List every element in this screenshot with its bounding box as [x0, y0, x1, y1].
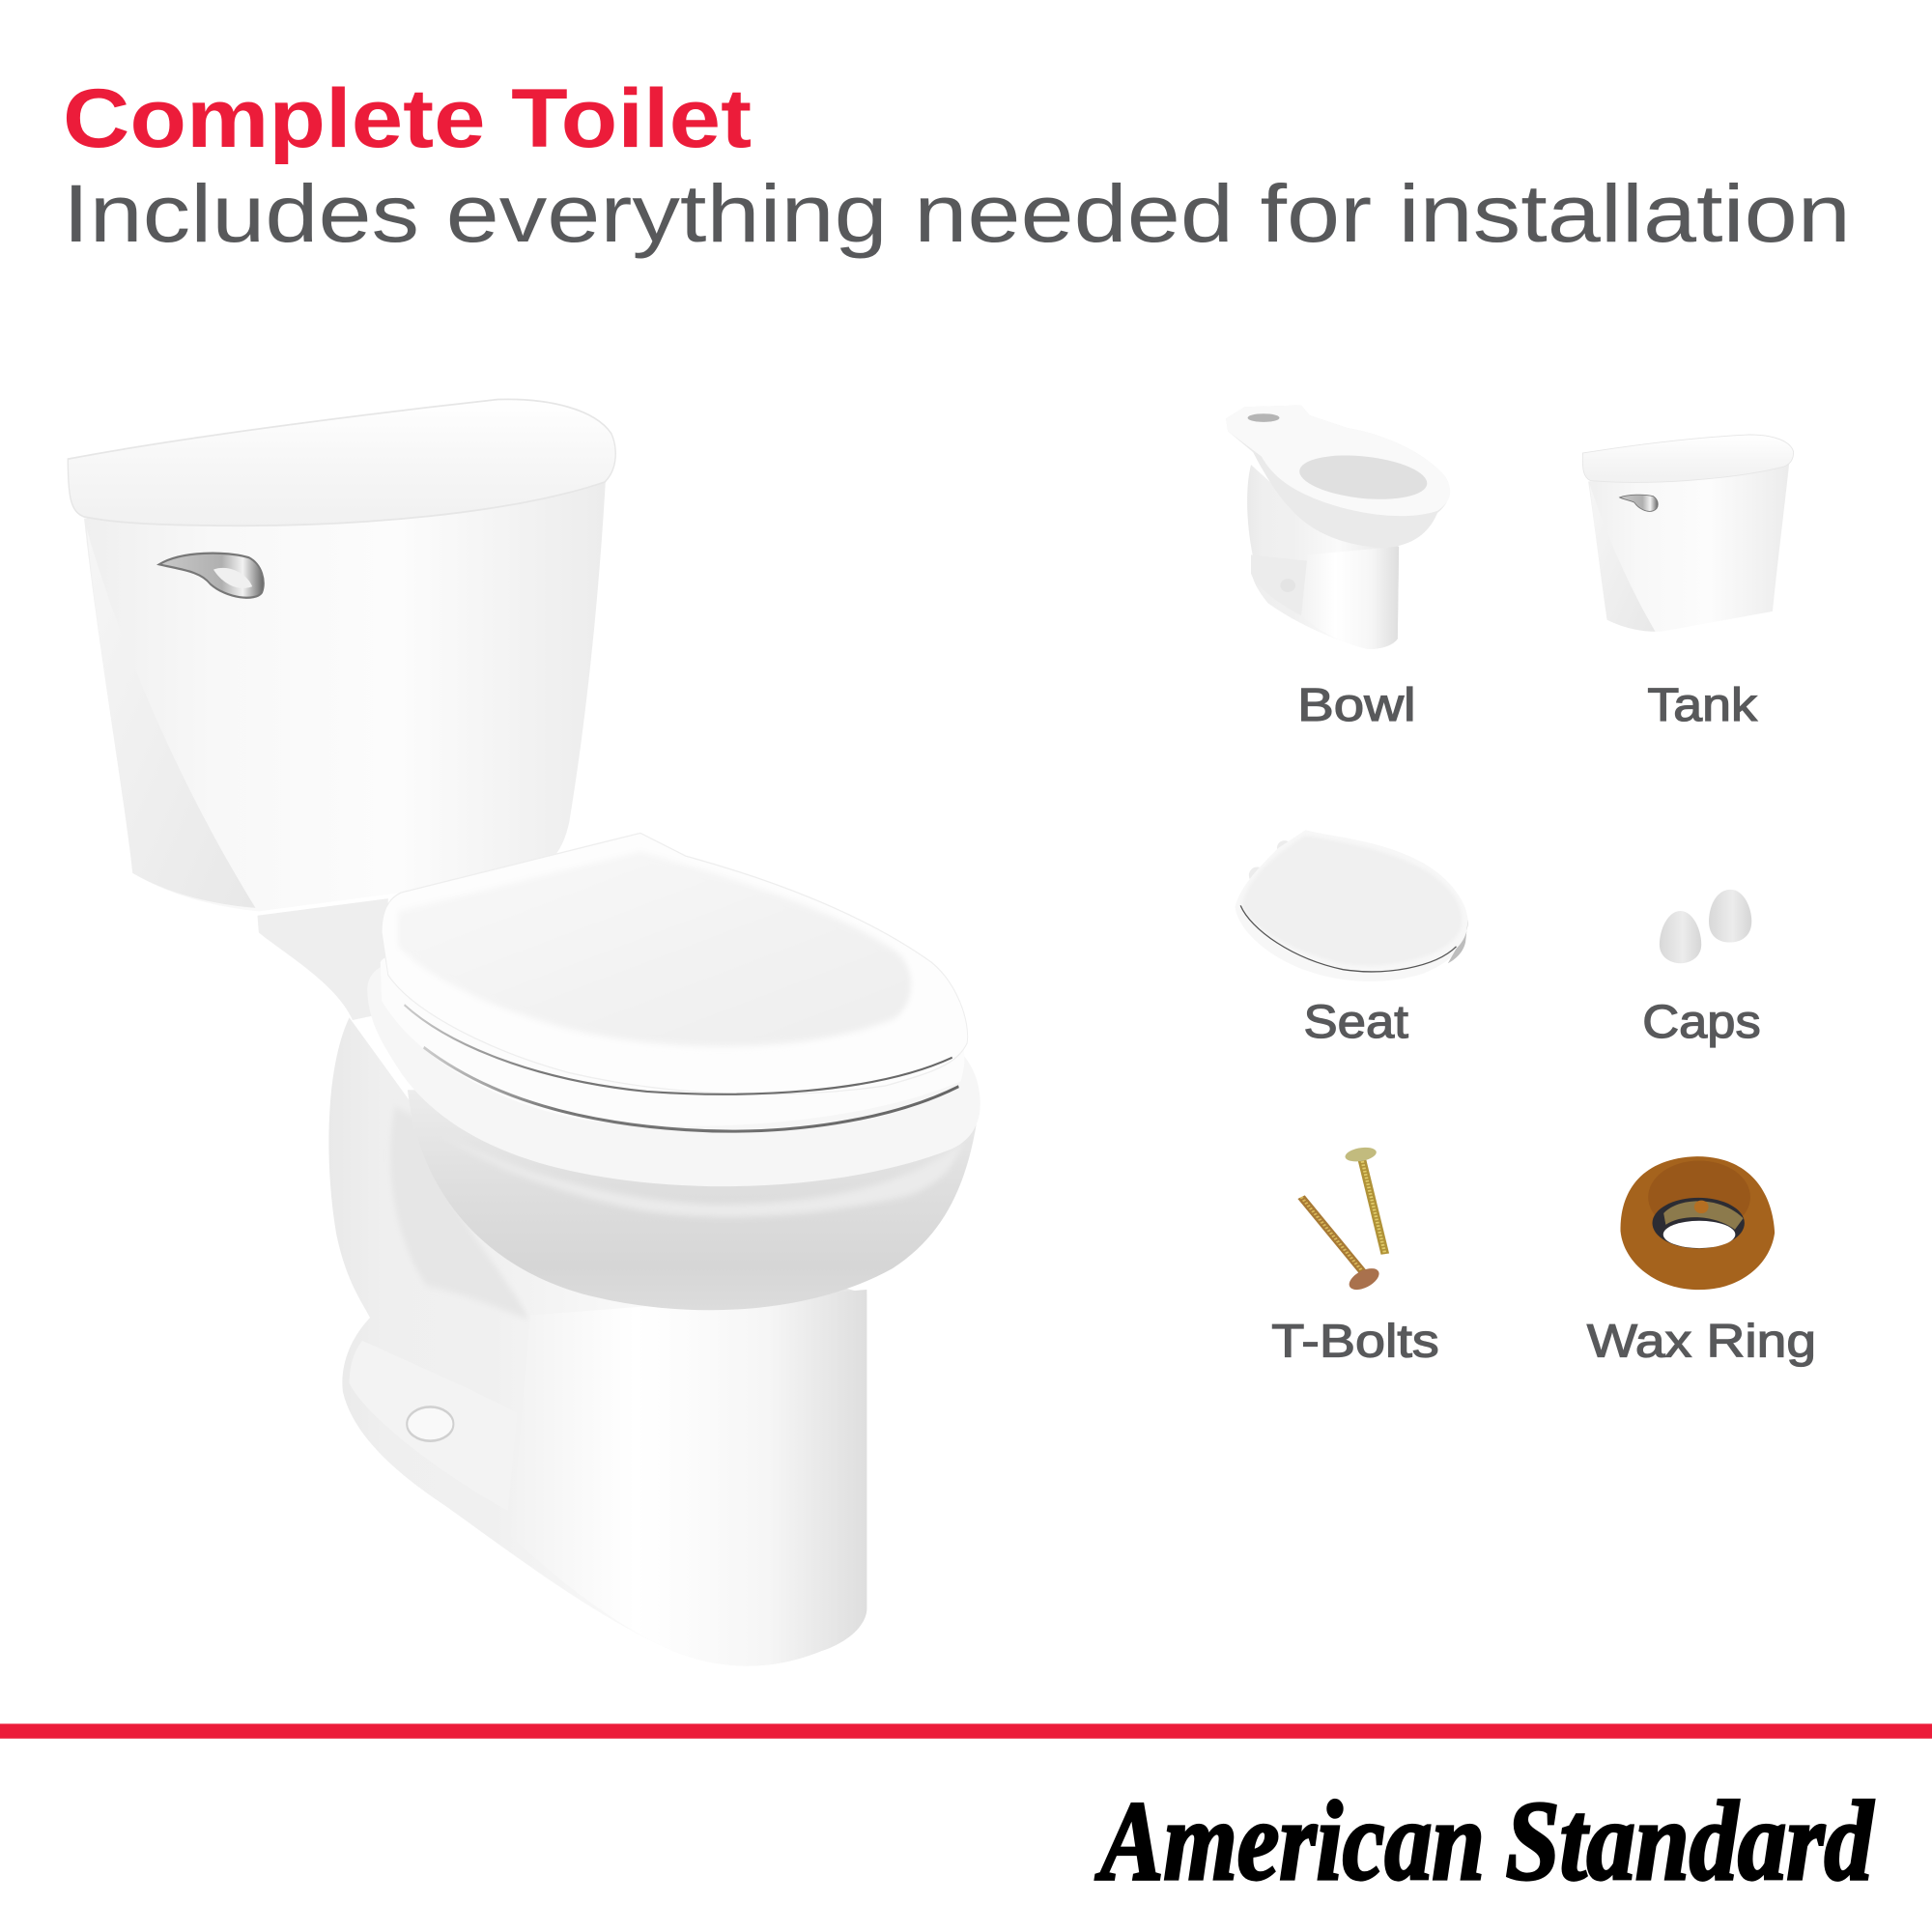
parts: bowl — [1226, 406, 1450, 649]
bowl rim — [367, 959, 980, 1186]
label: Caps: Caps — [1642, 996, 1761, 1048]
seat shadow lines — [405, 1005, 958, 1131]
neck — [258, 898, 388, 1020]
seat lid — [382, 833, 968, 1094]
lighter bowl band — [440, 1132, 964, 1217]
flush handle — [159, 554, 264, 598]
label: T-Bolts: T-Bolts — [1271, 1315, 1439, 1367]
bowl underside — [408, 1090, 980, 1310]
parts: seat — [1236, 830, 1468, 981]
tank lid — [68, 399, 615, 526]
pedestal — [511, 1290, 867, 1666]
foot ledge — [350, 1341, 518, 1511]
rear body and foot — [328, 1017, 867, 1666]
title: Complete Toilet: Complete Toilet — [63, 71, 752, 165]
label: Tank: Tank — [1647, 679, 1758, 731]
main toilet illustration — [68, 399, 980, 1666]
parts: t-bolts — [1301, 1145, 1385, 1293]
label: Wax Ring: Wax Ring — [1587, 1315, 1816, 1367]
label: Seat: Seat — [1303, 996, 1408, 1048]
parts: caps — [1660, 890, 1751, 963]
label: Bowl: Bowl — [1297, 679, 1416, 731]
red divider bar — [0, 1723, 1932, 1739]
channel shading — [390, 1107, 529, 1320]
seat lid dish — [398, 852, 911, 1046]
tank left facet — [87, 528, 256, 908]
toilet seat lower ring — [381, 955, 964, 1126]
subtitle: Includes everything needed for installation — [63, 168, 1851, 259]
parts: tank — [1582, 435, 1794, 632]
tank body — [84, 482, 606, 911]
parts: wax ring — [1621, 1156, 1775, 1290]
bolt cap — [407, 1406, 453, 1441]
logo: American Standard — [1094, 1778, 1875, 1904]
logo: American Standard: Standard — [1506, 1778, 1875, 1904]
logo: American Standard: American — [1094, 1778, 1485, 1904]
